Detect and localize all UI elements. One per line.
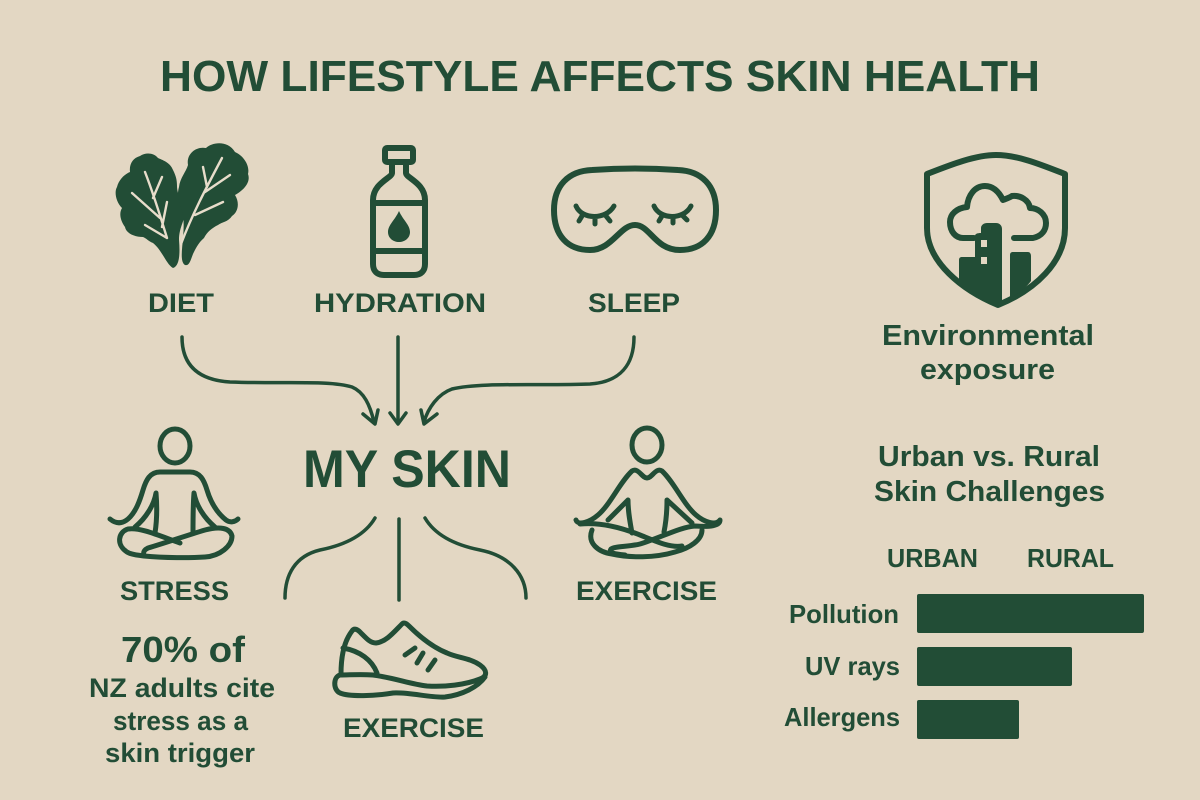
row label: allergens: Allergens (784, 702, 900, 732)
bar: uv rays (917, 647, 1072, 686)
icon: sleep mask (554, 168, 716, 250)
chart header: rural: RURAL (1027, 543, 1114, 573)
icon: running shoe (335, 623, 486, 697)
heading: urban vs rural: Urban vs. Rural (878, 441, 1100, 473)
heading: urban vs rural: Skin Challenges (874, 476, 1105, 508)
label: sleep: SLEEP (588, 288, 680, 318)
icon: leafy greens (116, 143, 249, 268)
label: exercise shoe: EXERCISE (343, 713, 484, 743)
title: HOW LIFESTYLE AFFECTS SKIN HEALTH (160, 52, 1040, 101)
bar: allergens (917, 700, 1019, 739)
stat: 70% of NZ adults: NZ adults cite (89, 673, 275, 703)
icon: shield with city and cloud (927, 155, 1065, 307)
heading: urban vs rural (874, 441, 1105, 508)
stat: 70% of NZ adults: skin trigger (105, 738, 255, 768)
bar chart: urban vs rural (784, 543, 1144, 739)
label: stress: STRESS (120, 576, 229, 606)
icon: water bottle (373, 148, 425, 275)
heading: my skin: MY SKIN (303, 440, 511, 499)
label: environmental exposure: Environmental (882, 320, 1094, 352)
connector: skin to exercise pose (425, 518, 526, 598)
row label: uv rays: UV rays (805, 651, 900, 681)
label: exercise pose: EXERCISE (576, 576, 717, 606)
stat: 70% of NZ adults: 70% of (121, 629, 246, 670)
icon: meditating person (exercise) (576, 428, 720, 557)
stat: 70% of NZ adults (89, 629, 275, 768)
stat: 70% of NZ adults: stress as a (113, 706, 249, 736)
connector: skin to exercise shoe (397, 519, 401, 600)
arrow: sleep to my skin (421, 337, 634, 424)
label: hydration: HYDRATION (314, 288, 486, 318)
label: environmental exposure (882, 320, 1094, 386)
icon: meditating person (stress) (110, 429, 238, 558)
arrow: hydration to my skin (390, 337, 406, 424)
arrow: diet to my skin (182, 337, 378, 424)
label: environmental exposure: exposure (920, 354, 1055, 386)
row label: pollution: Pollution (789, 599, 899, 629)
label: diet: DIET (148, 288, 215, 318)
connector: skin to stress (285, 518, 375, 598)
chart header: urban: URBAN (887, 543, 978, 573)
bar: pollution (917, 594, 1144, 633)
